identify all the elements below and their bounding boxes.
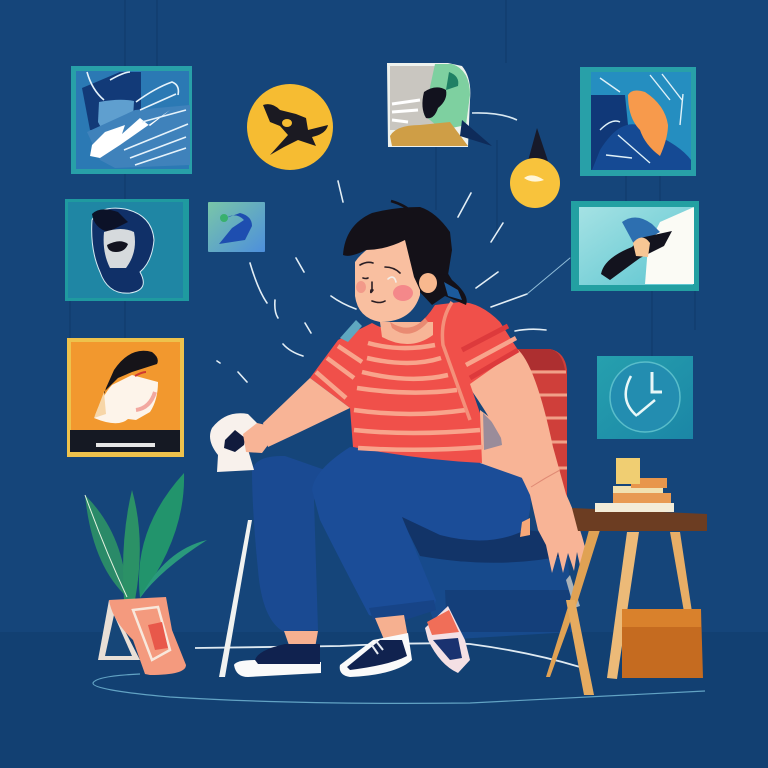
side table (546, 458, 707, 695)
shirt (310, 302, 518, 463)
left shoe (234, 644, 321, 677)
ankles (284, 631, 318, 648)
hair back (418, 240, 467, 305)
yellow circle badge with bird silhouette (247, 84, 333, 170)
chair seat blue (400, 515, 572, 640)
back foot shoe (425, 606, 470, 673)
white stand behind pot (98, 600, 140, 660)
small gradient tile (208, 202, 265, 252)
person (210, 201, 585, 677)
picture frame: abstract blue (71, 66, 192, 174)
picture frame: dark hair portrait (65, 199, 189, 301)
hand-held paper (210, 413, 258, 472)
ear (419, 273, 437, 293)
picture frame: pale cyan with dark shape (571, 201, 699, 291)
floor (0, 632, 768, 768)
picture frame: orange head (580, 67, 696, 176)
table top (572, 508, 707, 531)
neck (380, 322, 433, 344)
eyes, brows, nose and mouth (360, 262, 400, 302)
face (355, 236, 420, 322)
plant (85, 473, 207, 675)
knee skin patch (520, 518, 530, 537)
pale blue smear at shoulder (340, 320, 362, 342)
shirt stripes (316, 338, 516, 450)
right shoe (340, 633, 412, 677)
chair back red stripes (510, 349, 567, 500)
picture frame: orange portrait with caption band (67, 338, 184, 457)
darker sleeve bands (462, 326, 518, 378)
thigh and far shin (312, 447, 531, 622)
right arm and hand (467, 348, 585, 573)
picture frame: clock (597, 356, 693, 439)
paper collage picture (387, 63, 517, 147)
table legs (546, 530, 692, 695)
near leg (252, 456, 325, 632)
books and cup (595, 458, 674, 512)
belly skin and gray undershirt (480, 410, 530, 480)
hanging light bulb (510, 128, 560, 208)
motion lines around the head (217, 181, 570, 382)
chair (400, 349, 580, 640)
hair (343, 207, 452, 290)
storage box (622, 609, 703, 678)
white chair leg (219, 520, 252, 677)
cheek blush (393, 285, 413, 301)
floor ring and cord (93, 643, 705, 703)
plant leaves (85, 473, 207, 600)
left arm and hand (243, 378, 350, 453)
plant pot (109, 597, 186, 675)
